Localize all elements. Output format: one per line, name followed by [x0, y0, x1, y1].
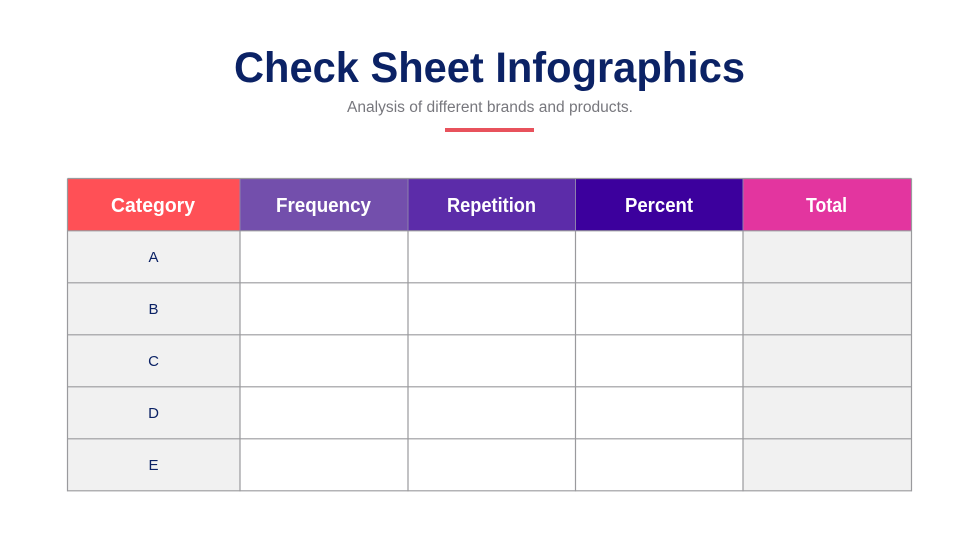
row label C: C: [148, 353, 159, 370]
accent underline: [445, 128, 534, 132]
header cell: Total: Total: [806, 195, 847, 217]
subtitle: Analysis of different brands and products.: [347, 99, 633, 116]
header cell: Frequency: Frequency: [276, 195, 372, 217]
total column shading: [743, 231, 911, 491]
header cell: Repetition: Repetition: [447, 195, 536, 217]
title: Check Sheet Infographics: [234, 44, 745, 92]
row labels: [148, 249, 159, 474]
header cell: Percent: Percent: [625, 195, 693, 217]
row label A: A: [148, 249, 159, 266]
header cell: Total: [743, 179, 911, 231]
header column separators: [240, 179, 743, 231]
row label D: D: [148, 405, 159, 422]
row label E: E: [148, 457, 159, 474]
header cell: Category: [68, 179, 240, 231]
table grid lines: [68, 178, 912, 491]
header cell: Frequency: [240, 179, 408, 231]
category column shading: [68, 231, 240, 491]
header cell: Repetition: [408, 179, 576, 231]
header cell: Category: Category: [111, 195, 196, 217]
check sheet table: [68, 178, 912, 491]
header cell: Percent: [576, 179, 743, 231]
table header row: [68, 179, 911, 231]
row label B: B: [148, 301, 159, 318]
